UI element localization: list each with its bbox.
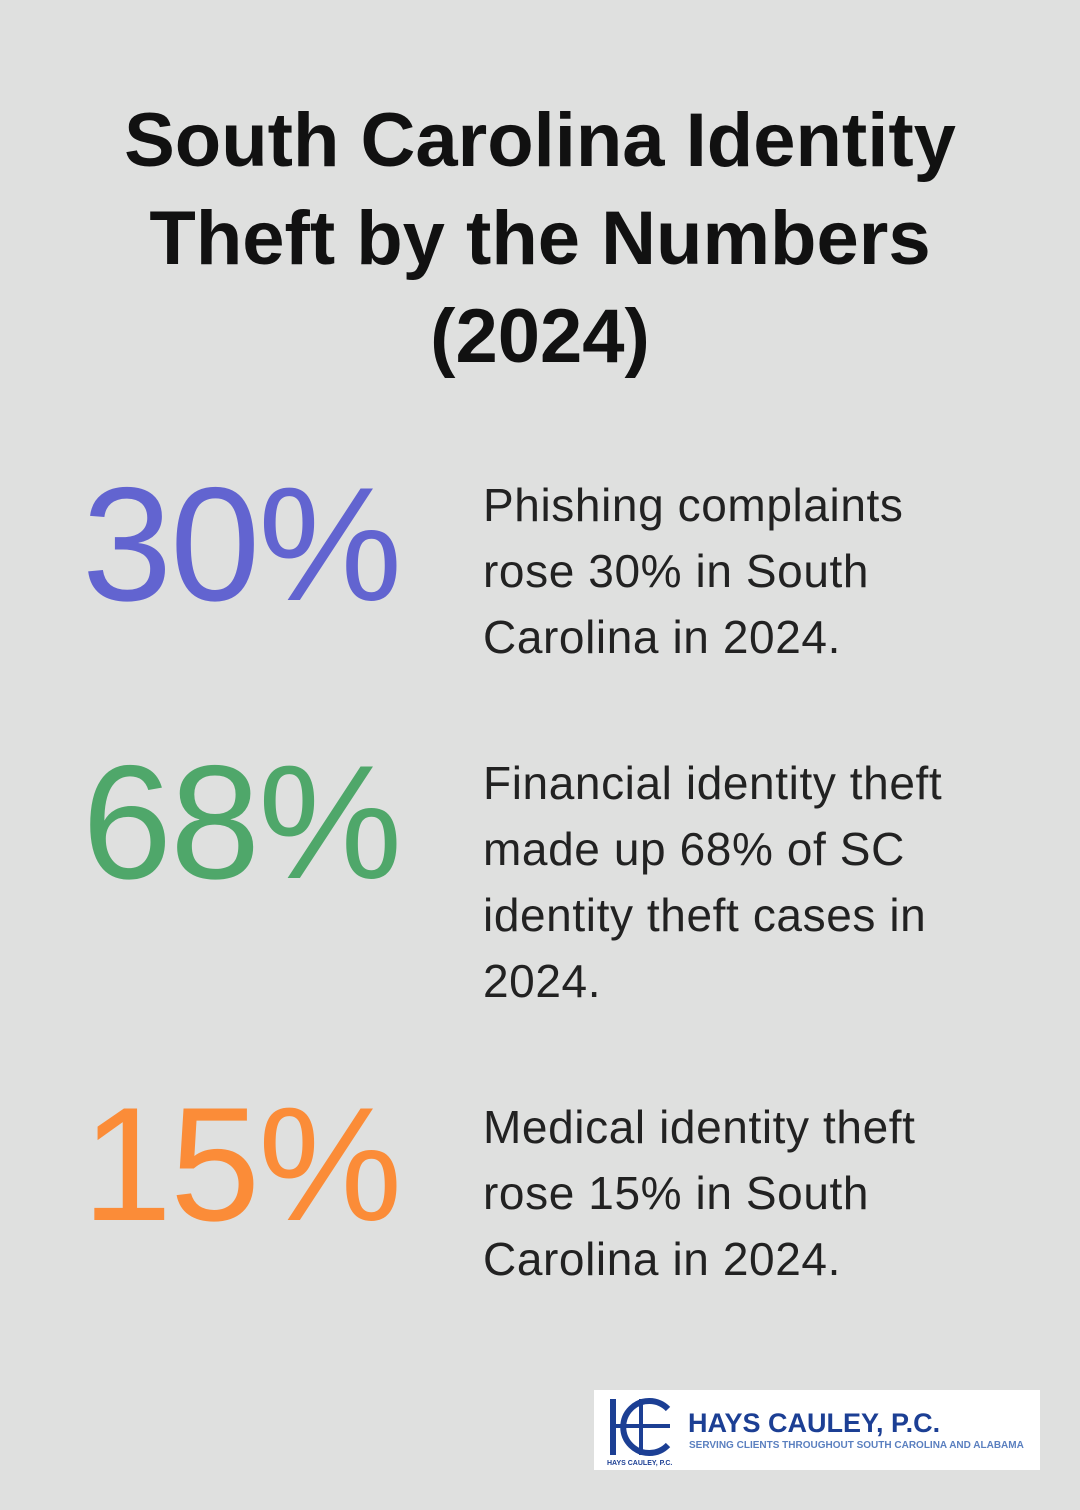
- logo: HAYS CAULEY, P.C.: [688, 1408, 940, 1438]
- stat: 15%: 15%: [82, 1074, 400, 1255]
- text: phishing: rose 30% in South: [483, 545, 869, 597]
- logo: SERVING CLIENTS THROUGHOUT SOUTH CAROLINA AND ALABAMA: [689, 1440, 1024, 1451]
- text: financial: identity theft cases in: [483, 889, 926, 941]
- logo: [594, 1390, 1040, 1470]
- logo: HAYS CAULEY, P.C.: [607, 1460, 672, 1467]
- title: Theft by the Numbers: [149, 196, 931, 281]
- title: South Carolina Identity: [124, 98, 956, 183]
- stat: 68%: 68%: [82, 732, 400, 913]
- text: financial: [483, 757, 942, 1007]
- text: financial: 2024.: [483, 955, 601, 1007]
- text: financial: made up 68% of SC: [483, 823, 905, 875]
- text: medical: [483, 1101, 916, 1285]
- text: medical: rose 15% in South: [483, 1167, 869, 1219]
- text: phishing: Carolina in 2024.: [483, 611, 841, 663]
- text: financial: Financial identity theft: [483, 757, 942, 809]
- text: phishing: [483, 479, 904, 663]
- stat: 30%: 30%: [82, 454, 400, 635]
- icon: HC monogram: [610, 1398, 670, 1456]
- text: medical: Medical identity theft: [483, 1101, 916, 1153]
- text: phishing: Phishing complaints: [483, 479, 904, 531]
- text: medical: Carolina in 2024.: [483, 1233, 841, 1285]
- title: (2024): [430, 294, 650, 379]
- title: [124, 98, 956, 379]
